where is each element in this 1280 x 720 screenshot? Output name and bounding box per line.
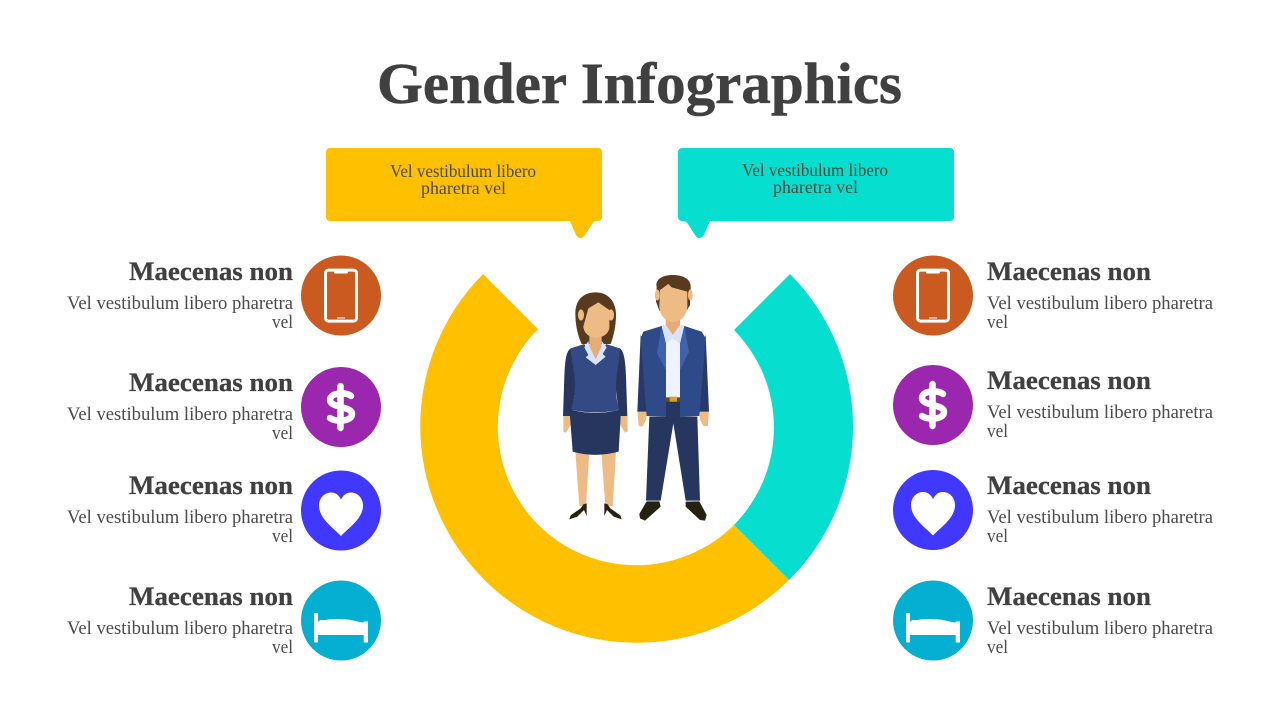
- icon: bed: [893, 580, 973, 660]
- body text: [987, 619, 1213, 658]
- callout: yellow: [326, 148, 602, 238]
- body text: Vel vestibulum libero pharetra: [987, 403, 1213, 423]
- body text: [67, 619, 293, 658]
- icon: phone: [893, 256, 973, 336]
- title: Gender Infographics: [377, 51, 902, 116]
- body text: vel: [272, 638, 293, 658]
- left item 2: dollar: [67, 367, 381, 447]
- body text: vel: [272, 527, 293, 547]
- body text: [67, 294, 293, 333]
- body text: Vel vestibulum libero pharetra: [987, 508, 1213, 528]
- icon: heart: [893, 470, 973, 550]
- right item 4: bed: [893, 580, 1213, 660]
- body text: [987, 403, 1213, 442]
- man: [637, 275, 709, 521]
- left item 4: bed: [67, 580, 381, 660]
- body text: vel: [272, 313, 293, 333]
- body text: Vel vestibulum libero pharetra: [67, 508, 293, 528]
- left item 3: heart: [67, 470, 381, 550]
- body text: Vel vestibulum libero pharetra: [987, 294, 1213, 314]
- heading: Maecenas non: [129, 367, 293, 397]
- heading: Maecenas non: [987, 365, 1151, 395]
- right item 1: phone: [893, 256, 1213, 336]
- body text: vel: [987, 422, 1008, 442]
- donut chart: [420, 274, 853, 643]
- right item 2: dollar: [893, 365, 1213, 445]
- teal segment: [734, 274, 853, 580]
- body text: [67, 508, 293, 547]
- body text: vel: [987, 313, 1008, 333]
- body text: [67, 405, 293, 444]
- body text: vel: [272, 424, 293, 444]
- body text: vel: [987, 638, 1008, 658]
- body text: Vel vestibulum libero pharetra: [987, 619, 1213, 639]
- heading: Maecenas non: [129, 470, 293, 500]
- yellow segment: [420, 274, 789, 643]
- body text: [987, 294, 1213, 333]
- callout: teal: pharetra vel: [773, 177, 858, 197]
- body text: [987, 508, 1213, 547]
- body text: vel: [987, 527, 1008, 547]
- body text: Vel vestibulum libero pharetra: [67, 619, 293, 639]
- right item 3: heart: [893, 470, 1213, 550]
- callout: yellow: pharetra vel: [421, 178, 506, 198]
- callout: teal: Vel vestibulum libero: [742, 160, 888, 180]
- heading: Maecenas non: [129, 581, 293, 611]
- body text: Vel vestibulum libero pharetra: [67, 294, 293, 314]
- icon: heart: [301, 470, 381, 550]
- left item 1: phone: [67, 256, 381, 336]
- icon: bed: [301, 580, 381, 660]
- heading: Maecenas non: [129, 256, 293, 286]
- icon: dollar: [301, 367, 381, 447]
- figures: woman and man: [563, 275, 709, 521]
- callout: teal: [678, 148, 954, 238]
- heading: Maecenas non: [987, 256, 1151, 286]
- heading: Maecenas non: [987, 581, 1151, 611]
- body text: Vel vestibulum libero pharetra: [67, 405, 293, 425]
- icon: phone: [301, 256, 381, 336]
- callout: yellow: Vel vestibulum libero: [390, 161, 536, 181]
- icon: dollar: [893, 365, 973, 445]
- heading: Maecenas non: [987, 470, 1151, 500]
- woman: [563, 292, 628, 519]
